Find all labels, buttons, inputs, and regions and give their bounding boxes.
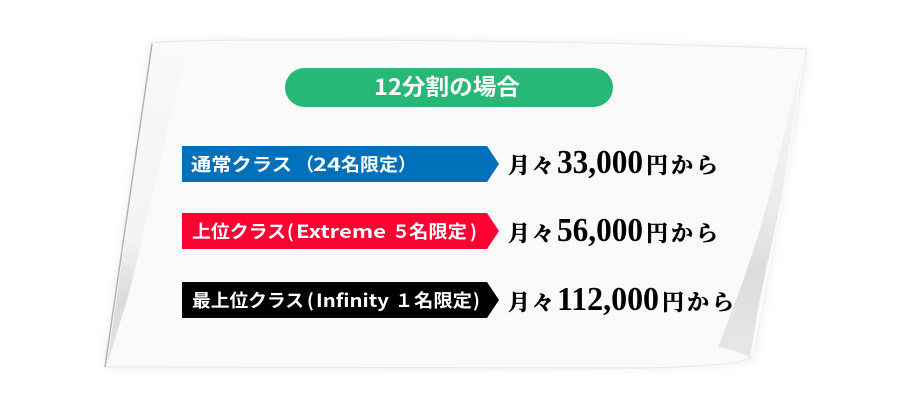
price: regular class <box>508 144 718 181</box>
price: regular class: 33,000 <box>557 144 643 181</box>
label arrow: regular class: 24 <box>313 151 341 177</box>
label arrow: upper class: 名限定 <box>409 218 467 244</box>
row 1: regular class <box>182 144 718 182</box>
paper sheet <box>104 40 808 368</box>
label arrow: regular class: ） <box>398 151 416 177</box>
price: upper class: 56,000 <box>557 212 643 249</box>
label arrow: top class <box>182 282 499 318</box>
price: regular class: 月々 <box>508 149 554 180</box>
label arrow: regular class: 名限定 <box>341 151 398 177</box>
label arrow: top class: １ <box>395 287 413 313</box>
label arrow: upper class: 上位クラス <box>192 218 286 244</box>
label arrow: upper class: ５ <box>392 218 410 244</box>
label arrow: regular class <box>182 146 499 182</box>
price: upper class: 月々 <box>508 217 554 248</box>
label arrow: regular class: （ <box>296 151 314 177</box>
price: top class: 112,000 <box>557 281 659 318</box>
label arrow: upper class: ( <box>287 218 294 244</box>
heading pill: 12分割の場合 <box>374 70 521 102</box>
row 3: top class <box>182 281 734 318</box>
label arrow: regular class: 通常クラス <box>191 151 292 177</box>
heading pill <box>285 68 613 107</box>
price: top class: 円から <box>662 286 734 317</box>
label arrow: top class: 最上位クラス <box>192 287 304 313</box>
left fold <box>105 44 184 367</box>
price: upper class <box>508 212 718 249</box>
label arrow: top class: Infinity <box>316 287 390 313</box>
label arrow: upper class: ) <box>470 218 477 244</box>
right fold <box>718 50 805 358</box>
price: upper class: 円から <box>646 217 718 248</box>
price: top class <box>508 281 734 318</box>
label arrow: upper class: Extreme <box>296 218 386 244</box>
price: regular class: 円から <box>646 149 718 180</box>
label arrow: top class: ) <box>473 287 480 313</box>
row 2: upper class <box>182 212 718 249</box>
label arrow: top class: 名限定 <box>414 287 472 313</box>
price: top class: 月々 <box>508 286 554 317</box>
label arrow: top class: ( <box>307 287 314 313</box>
label arrow: upper class <box>182 213 499 249</box>
